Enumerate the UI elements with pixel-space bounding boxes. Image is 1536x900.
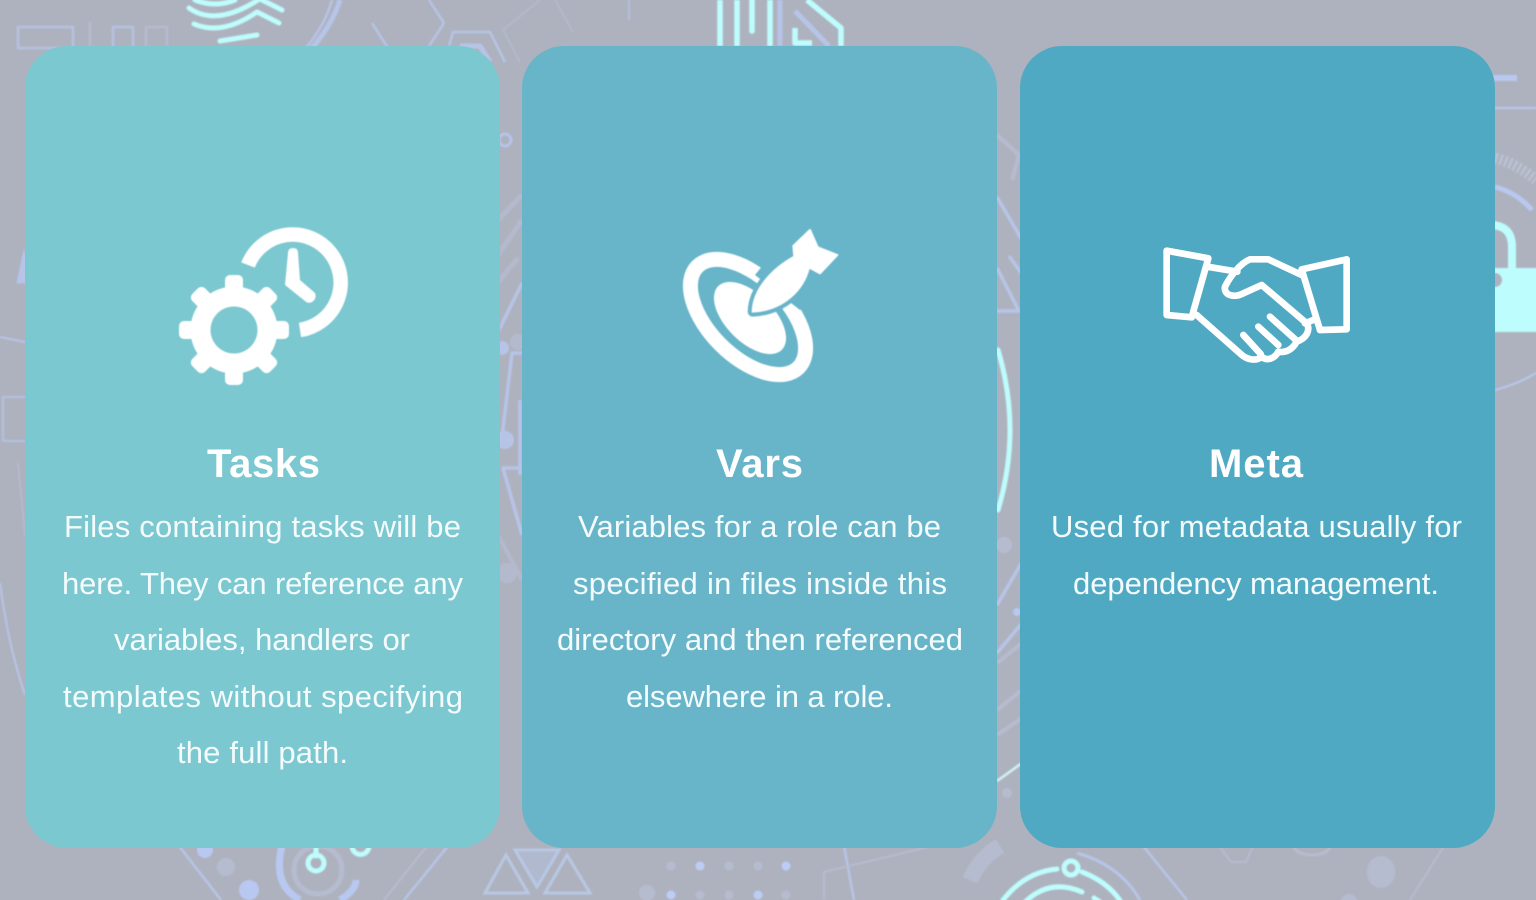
text: tasks description: Files containing tasks will be [64, 509, 461, 544]
text: vars description: directory and then referenced [557, 622, 963, 657]
faint hexagon [503, 0, 573, 62]
icon: gear and clock [179, 235, 341, 385]
gap details: second gutter [996, 135, 1022, 798]
heading: Meta: Meta [1209, 442, 1304, 486]
icon: handshake [1167, 251, 1347, 360]
text: vars description: specified in files inside this [573, 566, 947, 601]
top left outlines [18, 22, 167, 49]
icon: fingerprint bottom [1003, 861, 1121, 900]
dot grid [639, 862, 790, 900]
panel: meta [1020, 46, 1495, 848]
triangles [485, 850, 590, 893]
panel: tasks [25, 46, 500, 848]
top centre circuitry [306, 0, 829, 62]
bottom left circuitry [179, 842, 448, 900]
icon: target with dart [670, 230, 837, 395]
gap details: first gutter [495, 134, 526, 583]
icon: padlock [1488, 225, 1536, 332]
text: tasks description: here. They can reference any [62, 566, 464, 601]
text: tasks description [62, 509, 464, 770]
text: vars description: Variables for a role can be [578, 509, 941, 544]
right edge details [1490, 75, 1536, 390]
text: meta description [1051, 509, 1462, 601]
left edge details [0, 250, 30, 695]
text: meta description: dependency management. [1073, 566, 1439, 601]
heading: Vars: Vars [716, 442, 803, 486]
text: vars description [557, 509, 963, 714]
top cyan bars [720, 0, 841, 46]
text: tasks description: variables, handlers or [114, 622, 410, 657]
icon: fingerprint top [189, 0, 282, 41]
panel: vars [522, 46, 997, 848]
text: tasks description: the full path. [177, 735, 348, 770]
text: meta description: Used for metadata usually for [1051, 509, 1462, 544]
heading: Tasks: Tasks [207, 442, 320, 486]
text: tasks description: templates without specifying [63, 679, 463, 714]
text: vars description: elsewhere in a role. [626, 679, 893, 714]
bottom right circuitry [824, 837, 1444, 900]
